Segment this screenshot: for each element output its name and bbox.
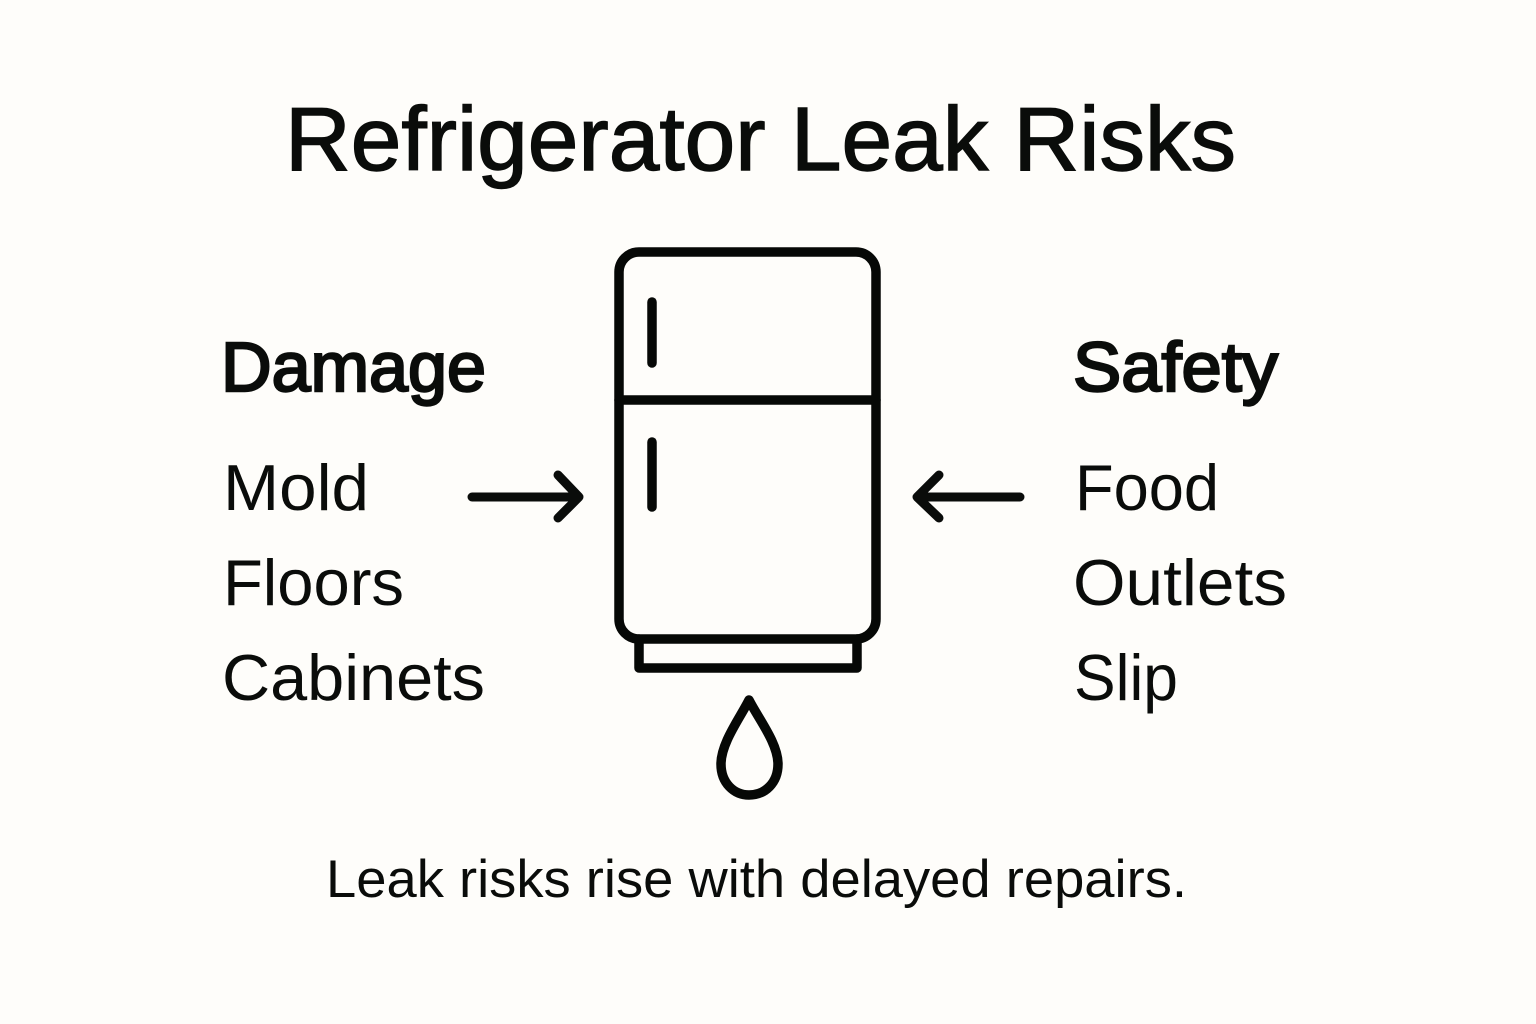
arrow: safety to refrigerator [917, 475, 1020, 518]
heading: safety: Safety [1073, 328, 1278, 406]
refrigerator body [619, 252, 876, 639]
caption: Leak risks rise with delayed repairs. [326, 850, 1187, 909]
panel: safety [1073, 328, 1287, 714]
title: Refrigerator Leak Risks [285, 90, 1236, 190]
door divider [619, 395, 876, 405]
list item: mold: Mold [223, 451, 369, 524]
lower door handle [647, 442, 657, 507]
icon: refrigerator [619, 252, 876, 668]
panel: damage [221, 328, 486, 714]
arrow: damage to refrigerator [472, 475, 579, 518]
list item: cabinets: Cabinets [222, 641, 485, 714]
list item: outlets: Outlets [1073, 546, 1287, 619]
upper door handle [647, 302, 657, 363]
icon: water drop [721, 700, 778, 795]
list item: food: Food [1075, 451, 1219, 524]
refrigerator base [639, 639, 857, 668]
heading: damage: Damage [221, 328, 486, 406]
list item: floors: Floors [223, 546, 404, 619]
list item: slip: Slip [1074, 641, 1178, 714]
